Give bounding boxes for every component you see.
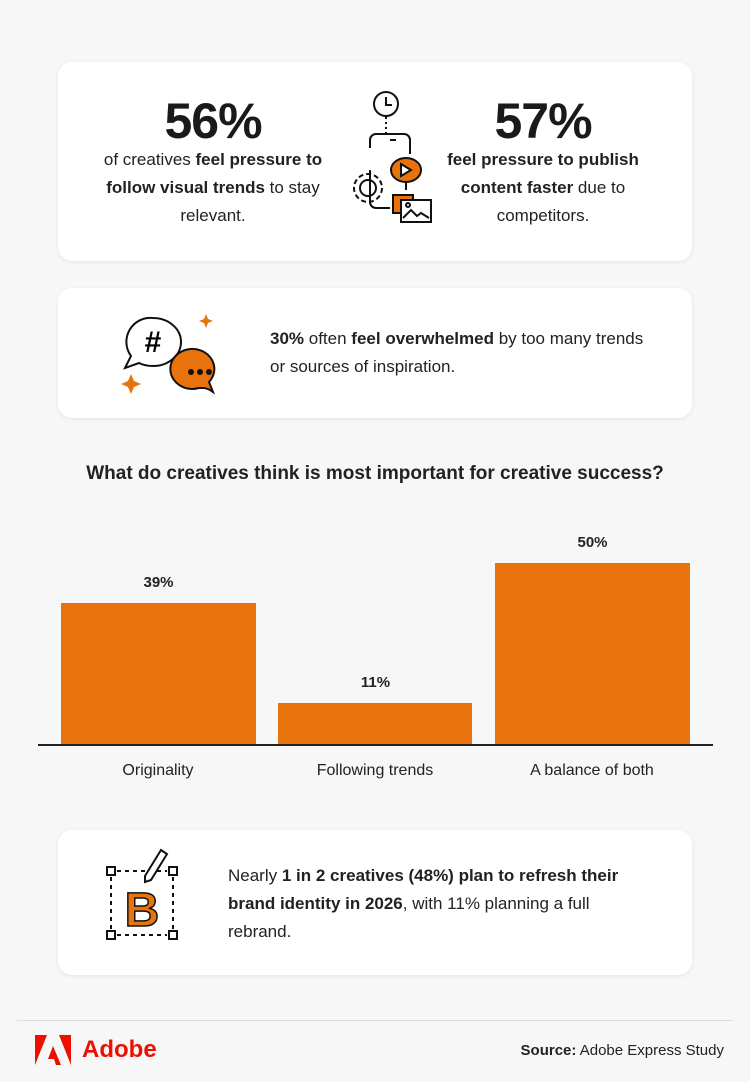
icon: phone workflow [353,91,432,223]
bar chart: 39% [143,574,174,591]
text: 30% often feel overwhelmed by too many trends or sources of inspiration. [270,329,643,376]
stat 56%: 56% [164,93,262,149]
bar chart [38,534,713,746]
stat 57% [447,93,639,225]
stat 56% [104,93,322,225]
icon: chat bubbles [121,314,216,395]
text: Following trends [317,762,433,779]
icon: B with pencil [106,848,178,940]
bar chart: 11% [361,674,390,691]
bar labels: Originality [122,762,194,779]
logo: Adobe: Adobe [82,1036,157,1063]
card: brand refresh [58,830,692,975]
text: Nearly 1 in 2 creatives (48%) plan to refresh their brand identity in 2026, with 11% planning a full rebrand. [228,866,618,941]
icon: chat bubbles: # [145,326,162,359]
text: A balance of both [530,762,654,779]
card: pressure stats [58,62,692,261]
stat 56%: of creatives feel pressure to follow visual trends to stay relevant. [104,150,322,225]
logo: Adobe [35,1035,157,1065]
stat 57%: feel pressure to publish content faster due to competitors. [447,150,639,225]
stat 57%: 57% [494,93,592,149]
icon: B with pencil: B [125,884,159,937]
bar chart: 50% [577,534,608,551]
card: overwhelmed [58,288,692,418]
chart title: What do creatives think is most important for creative success? [86,463,664,484]
source: Source: Adobe Express Study [521,1042,724,1059]
